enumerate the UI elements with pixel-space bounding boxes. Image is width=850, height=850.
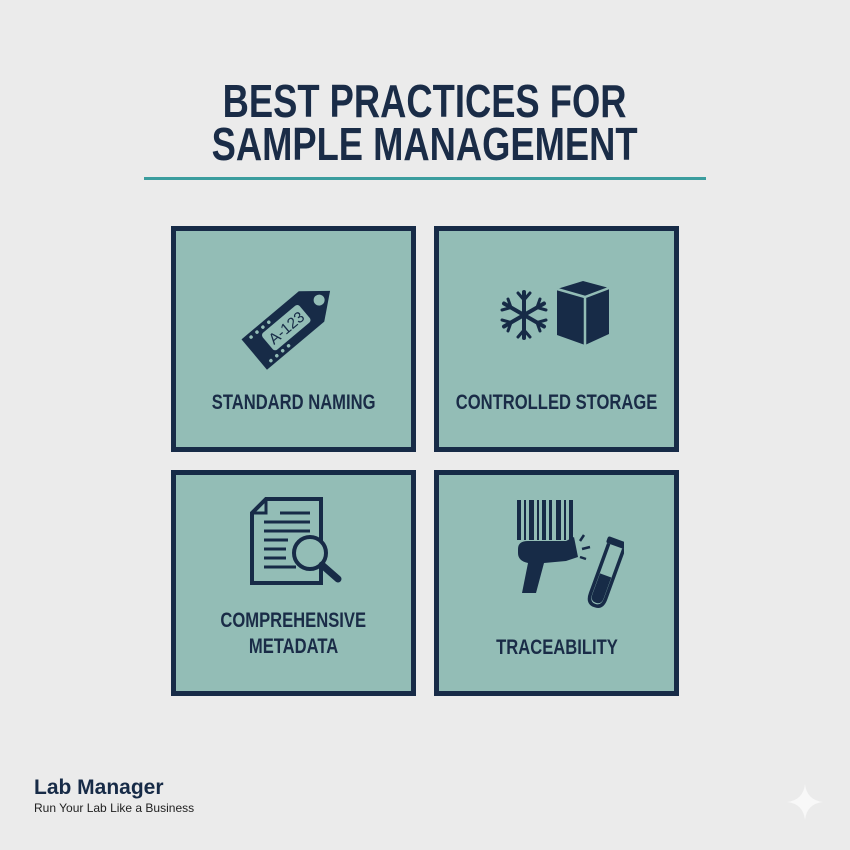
footer: brand: Lab Manager: [34, 776, 164, 799]
title: BEST PRACTICES FOR: [223, 75, 627, 127]
icon: snowflake and box: [500, 281, 609, 344]
label: TRACEABILITY: [496, 636, 617, 659]
panel: traceability: [434, 470, 679, 696]
icon: sparkle: [789, 786, 821, 818]
title: [212, 75, 638, 170]
label: METADATA: [249, 635, 338, 658]
panel: controlled storage: [434, 226, 679, 452]
icon: barcode scanner and test tube: [517, 500, 624, 608]
icon: document with magnifier: [250, 497, 342, 585]
icon: tag: A-123: [266, 309, 308, 348]
footer: brand: Run Your Lab Like a Business: [34, 801, 194, 815]
panel: standard naming: [171, 226, 416, 452]
label: STANDARD NAMING: [212, 391, 375, 414]
label: COMPREHENSIVE: [221, 609, 366, 632]
label: [221, 609, 366, 658]
title: SAMPLE MANAGEMENT: [212, 118, 638, 170]
icon: tag: [242, 290, 330, 370]
panel: comprehensive metadata: [171, 470, 416, 696]
footer: brand: [34, 776, 194, 815]
label: CONTROLLED STORAGE: [456, 391, 657, 414]
